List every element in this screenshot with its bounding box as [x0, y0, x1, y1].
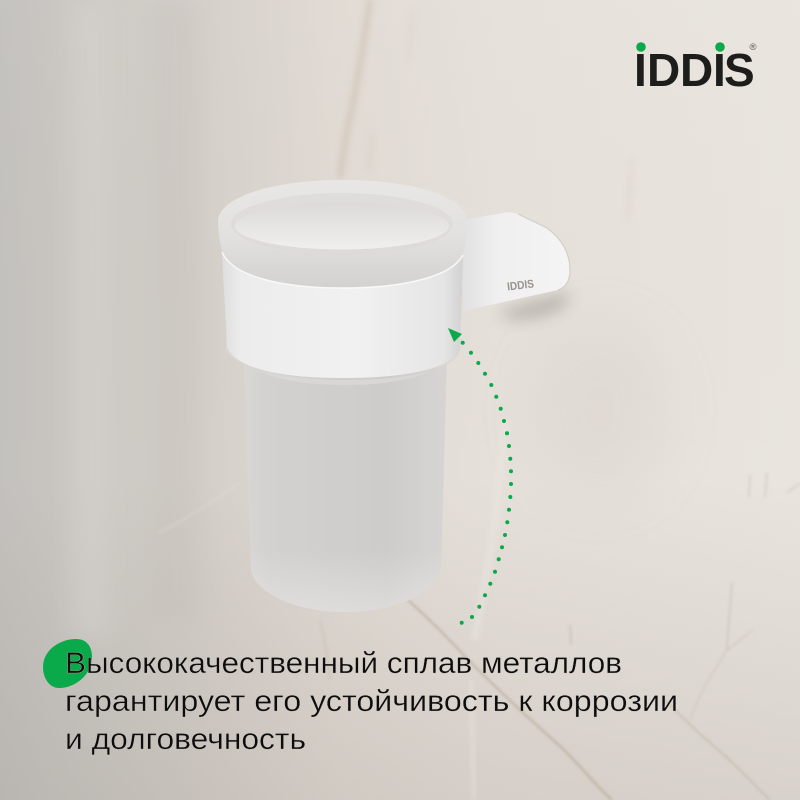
caption text: Высококачественный сплав металлов: [65, 647, 622, 680]
caption text: гарантирует его устойчивость к коррозии: [65, 685, 678, 718]
caption text: и долговечность: [65, 723, 306, 756]
glass rim: [218, 180, 467, 290]
arrow dots: [460, 341, 513, 625]
registered mark: ®: [750, 42, 756, 53]
rim opening: [231, 193, 453, 255]
bracket engraved logo: IDDIS: [506, 278, 535, 294]
caption text: [65, 647, 678, 756]
logo: IDDIS: IDDIS: [634, 44, 755, 96]
logo dot left: [636, 42, 646, 52]
logo dot right: [715, 42, 725, 52]
metal band lower lip: [226, 340, 460, 385]
arrow head: [448, 328, 462, 342]
product: wall bracket: [463, 212, 570, 318]
metal holder band: [222, 252, 463, 378]
green blob accent: [43, 639, 92, 688]
dotted arrow pointing to the holder: [448, 328, 513, 625]
product: frosted glass tumbler: [218, 180, 467, 612]
